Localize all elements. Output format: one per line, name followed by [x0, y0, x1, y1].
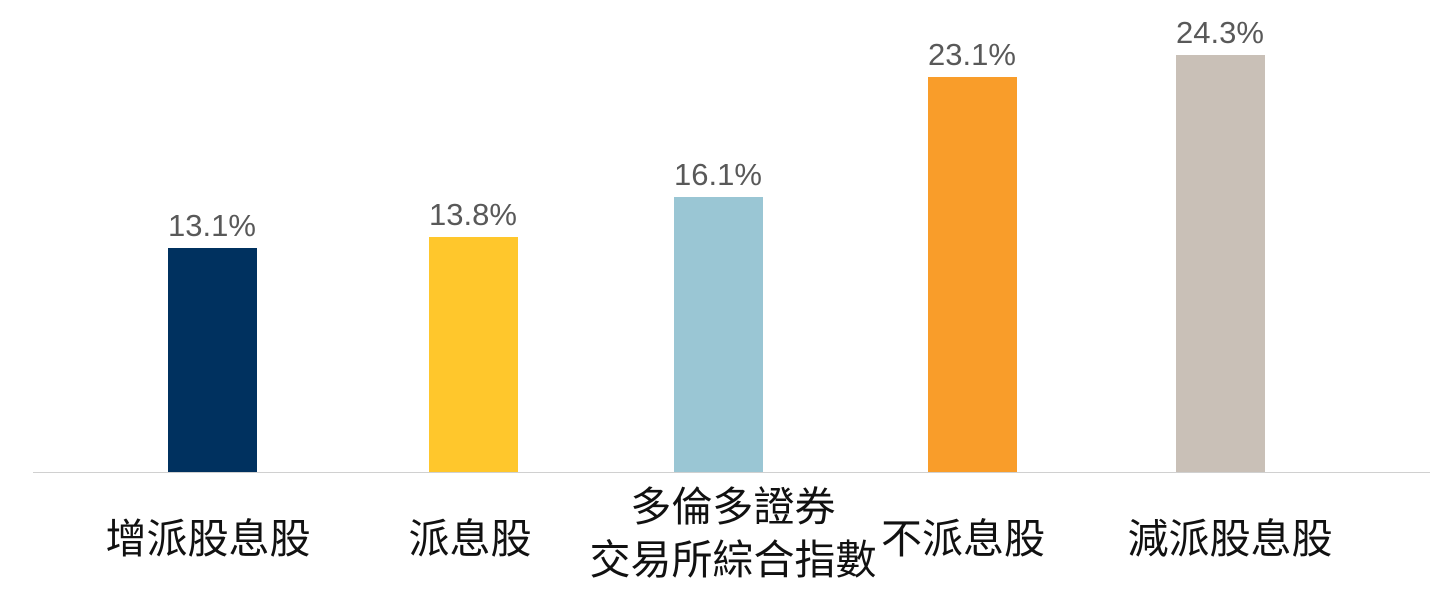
label: 多倫多證券交易所綜合指數: 多倫多證券: [630, 473, 836, 533]
value: 16.1%: 16.1%: [674, 157, 762, 192]
label: 多倫多證券交易所綜合指數: 交易所綜合指數: [590, 526, 876, 586]
bar: 不派息股: [928, 77, 1017, 472]
value: 24.3%: 24.3%: [1176, 15, 1264, 50]
value: 13.8%: 13.8%: [429, 197, 517, 232]
value: 23.1%: 23.1%: [928, 37, 1016, 72]
label: 多倫多證券交易所綜合指數: [590, 473, 876, 586]
bar: 派息股: [429, 237, 518, 472]
bar: 多倫多證券交易所綜合指數: [674, 197, 763, 472]
label: 派息股: 派息股: [408, 505, 532, 565]
label: 減派股息股: 減派股息股: [1128, 505, 1332, 565]
bar: 減派股息股: [1176, 55, 1265, 472]
axis baseline: [33, 472, 1430, 473]
label: 不派息股: 不派息股: [881, 505, 1045, 565]
value: 13.1%: 13.1%: [168, 208, 256, 243]
label: 增派股息股: 增派股息股: [106, 505, 310, 565]
bar: 增派股息股: [168, 248, 257, 472]
